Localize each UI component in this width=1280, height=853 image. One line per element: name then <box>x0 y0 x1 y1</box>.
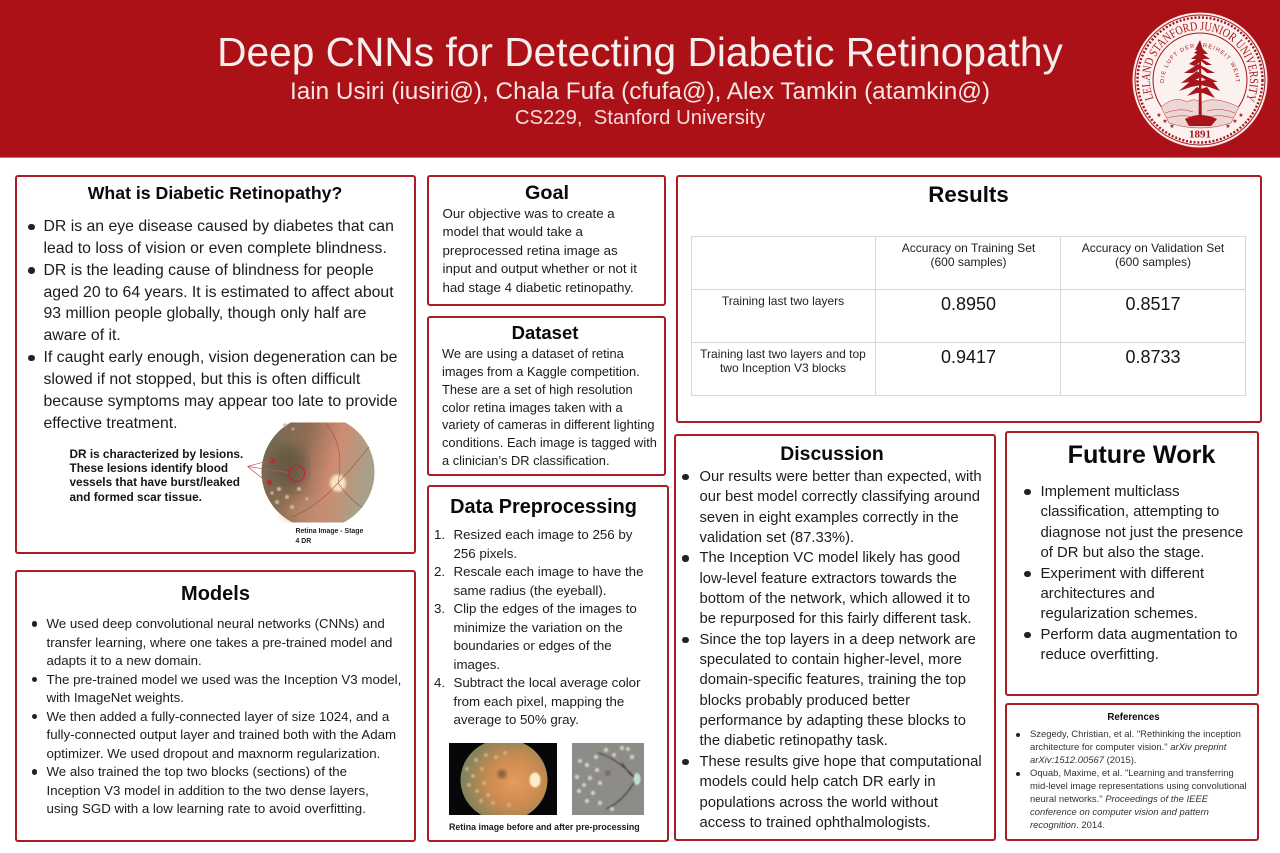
model bullets: fully-connected output layer and trained both with the Adam <box>46 727 396 742</box>
heading: Goal <box>525 182 569 204</box>
goal text: had stage 4 diabetic retinopathy. <box>442 280 634 294</box>
reference list: Szegedy, Christian, et al. "Rethinking the inception <box>1030 729 1241 740</box>
lesion caption: vessels that have burst/leaked <box>70 475 240 489</box>
bullet list: DR is the leading cause of blindness for people <box>44 262 374 279</box>
model bullets: We used deep convolutional neural networks (CNNs) and <box>46 616 385 631</box>
reference list: Oquab, Maxime, et al. "Learning and transferring <box>1030 768 1234 779</box>
lesion caption: These lesions identify blood <box>70 461 228 475</box>
heading: References <box>1107 712 1160 723</box>
image caption: Retina image before and after pre-processing <box>449 822 640 832</box>
goal text: input and output whether or not it <box>442 261 637 276</box>
dataset text <box>442 346 657 468</box>
future work bullets: Experiment with different <box>1040 566 1204 582</box>
discussion bullets: performance by adapting these blocks to <box>700 713 966 729</box>
future work bullets: diagnose not just the presence <box>1040 525 1243 541</box>
discussion bullets: bottom of the network, which allowed it to <box>700 591 970 607</box>
model bullets: adapts it to a new domain. <box>46 653 202 668</box>
authors: Iain Usiri (iusiri@), Chala Fufa (cfufa@), Alex Tamkin (atamkin@) <box>290 78 990 105</box>
bullet list: If caught early enough, vision degeneration can be <box>44 349 397 366</box>
numbered steps: Resized each image to 256 by <box>454 527 632 542</box>
header banner <box>0 0 1280 158</box>
numbered steps: from each pixel, mapping the <box>454 694 624 708</box>
heading: What is Diabetic Retinopathy? <box>88 182 342 202</box>
numbered steps: 256 pixels. <box>454 546 517 560</box>
reference list: arXiv:1512.00567 (2015). <box>1030 755 1137 766</box>
title: Deep CNNs for Detecting Diabetic Retinopathy <box>217 29 1063 75</box>
discussion bullets: the diabetic retinopathy task. <box>700 733 888 749</box>
panel: Future Work <box>1005 431 1259 696</box>
bullet list: because symptoms may appear too late to provide <box>44 393 397 410</box>
reference list: neural networks." Proceedings of the IEEE <box>1030 794 1208 805</box>
model bullets <box>32 616 401 816</box>
future work bullets: classification, attempting to <box>1040 504 1219 520</box>
results table: Accuracy on Training Set <box>901 240 1035 254</box>
retina image after pre-processing <box>572 743 644 815</box>
model bullets: transfer learning, where one takes a pre-trained model and <box>46 634 392 650</box>
future work bullets: regularization schemes. <box>1040 606 1198 622</box>
dataset text: color retina images taken with a <box>442 400 623 415</box>
discussion bullets: The Inception VC model likely has good <box>700 550 960 566</box>
discussion bullets: speculated to contain higher-level, more <box>700 652 962 668</box>
discussion bullets: validation set (87.33%). <box>700 530 854 546</box>
retina image: stage 4 DR <box>247 422 374 522</box>
icon: Stanford seal: ★ <box>1169 123 1175 130</box>
numbered steps <box>434 527 643 727</box>
results table <box>691 236 1246 396</box>
future work bullets: architectures and <box>1040 586 1155 602</box>
icon: Stanford seal: ★ <box>1162 118 1168 125</box>
image caption: 4 DR <box>296 538 311 544</box>
panel: Data Preprocessing <box>427 485 669 842</box>
model bullets: optimizer. We used dropout and maxnorm regularization. <box>46 746 380 760</box>
heading: Discussion <box>780 442 884 464</box>
lesion caption: DR is characterized by lesions. <box>70 447 243 461</box>
discussion bullets: Our results were better than expected, with <box>700 469 982 485</box>
icon: Stanford seal: ★ <box>1156 112 1162 119</box>
icon: Stanford seal: LELAND STANFORD JUNIOR UNIVERSITY <box>1142 22 1258 102</box>
lesion caption: and formed scar tissue. <box>70 490 202 504</box>
heading: Dataset <box>512 322 578 342</box>
results table: (600 samples) <box>930 254 1006 268</box>
results table: (600 samples) <box>1114 254 1191 268</box>
dataset text: conditions. Each image is tagged with <box>442 435 657 450</box>
dataset text: These are a set of high resolution <box>442 382 633 397</box>
results table: Training last two layers and top <box>700 346 866 360</box>
goal text: Our objective was to create a <box>442 206 615 220</box>
panel: Goal <box>427 175 666 306</box>
numbered steps: 3. <box>434 601 445 616</box>
future work bullets <box>1024 484 1243 663</box>
heading: Results <box>928 182 1009 207</box>
bullet list <box>28 218 397 432</box>
icon: Stanford seal: 1891 <box>1189 128 1211 140</box>
panel: Dataset <box>427 316 666 476</box>
discussion bullets: be repurposed for this fairly different task. <box>700 611 971 627</box>
numbered steps: same radius (the eyeball). <box>454 582 606 598</box>
results table: Accuracy on Validation Set <box>1081 240 1224 254</box>
numbered steps: average to 50% gray. <box>454 712 579 727</box>
panel: Results <box>676 175 1262 423</box>
numbered steps: images. <box>454 656 500 672</box>
bullet list: 93 million people globally, though only half are <box>44 305 366 322</box>
dataset text: a clinician’s DR classification. <box>442 453 610 468</box>
bullet list: DR is an eye disease caused by diabetes that can <box>44 218 394 235</box>
retina image before pre-processing <box>449 743 557 815</box>
goal text: model that would take a <box>442 224 583 239</box>
model bullets: The pre-trained model we used was the Inception V3 model, <box>46 672 401 686</box>
numbered steps: minimize the variation on the <box>454 620 623 634</box>
goal text: preprocessed retina image as <box>442 242 618 258</box>
discussion bullets: our best model correctly classifying around <box>700 489 980 505</box>
panel: Discussion <box>674 434 996 841</box>
discussion bullets: populations across the world without <box>700 794 938 810</box>
dataset text: variety of cameras in different lighting <box>442 417 655 432</box>
icon: Stanford seal: ★ <box>1232 118 1238 125</box>
icon: Stanford seal <box>1132 12 1268 148</box>
bullet list: slowed if not stopped, but this is often difficult <box>44 371 360 388</box>
model bullets: We then added a fully-connected layer of size 1024, and a <box>46 708 389 724</box>
panel: What is Diabetic Retinopathy <box>15 175 416 554</box>
discussion bullets: blocks probably produced better <box>700 693 910 709</box>
discussion bullets: These results give hope that computational <box>700 754 982 770</box>
discussion bullets: domain-specific features, training the top <box>700 672 966 688</box>
image caption <box>296 528 364 544</box>
reference list: mid-level image representations using convolutional <box>1030 781 1247 792</box>
reference list: architecture for computer vision." arXiv preprint <box>1030 742 1226 753</box>
numbered steps: Rescale each image to have the <box>454 564 643 579</box>
model bullets: with ImageNet weights. <box>46 690 184 705</box>
icon: Stanford seal: ★ <box>1238 112 1244 119</box>
icon: Stanford seal: DIE LUFT DER FREIHEIT WEHT <box>1160 43 1240 82</box>
model bullets: using SGD with a low learning rate to avoid overfitting. <box>46 801 366 816</box>
panel: References <box>1005 703 1259 841</box>
numbered steps: 1. <box>434 527 445 542</box>
results table: 0.8517 <box>1125 294 1180 314</box>
reference list: recognition. 2014. <box>1030 820 1105 831</box>
discussion bullets: access to trained ophthalmologists. <box>700 815 931 831</box>
image caption: Retina Image - Stage <box>296 528 363 535</box>
icon: Stanford seal: ★ <box>1225 123 1231 130</box>
dataset text: We are using a dataset of retina <box>442 346 624 361</box>
discussion bullets: low-level feature extractors towards the <box>700 571 957 587</box>
numbered steps: 2. <box>434 564 445 579</box>
future work bullets: Implement multiclass <box>1040 484 1180 500</box>
heading: Data Preprocessing <box>450 496 637 518</box>
numbered steps: Clip the edges of the images to <box>454 601 637 616</box>
numbered steps: boundaries or edges of the <box>454 638 612 653</box>
reference list <box>1016 729 1247 831</box>
bullet list: aged 20 to 64 years. It is estimated to affect about <box>44 284 394 301</box>
discussion bullets: seven in eight examples correctly in the <box>700 510 959 526</box>
discussion bullets: Since the top layers in a deep network are <box>700 632 976 648</box>
numbered steps: 4. <box>434 675 445 690</box>
bullet list: lead to loss of vision or even complete blindness. <box>44 240 387 257</box>
future work bullets: of DR but also the stage. <box>1040 545 1204 561</box>
bullet list: aware of it. <box>44 327 121 344</box>
reference list: conference on computer vision and pattern <box>1030 807 1209 818</box>
heading: Models <box>181 583 250 605</box>
results table: Training last two layers <box>721 294 844 308</box>
discussion bullets: models could help catch DR early in <box>700 774 936 790</box>
results table: two Inception V3 blocks <box>719 360 846 374</box>
panel: Models <box>15 570 416 842</box>
future work bullets: reduce overfitting. <box>1040 647 1159 663</box>
goal text <box>442 206 637 294</box>
discussion bullets <box>682 469 982 831</box>
results table: 0.8950 <box>940 294 996 314</box>
course and university: CS229, Stanford University <box>515 107 765 129</box>
model bullets: We also trained the top two blocks (sections) of the <box>46 764 347 779</box>
heading: Future Work <box>1068 441 1215 469</box>
lesion caption <box>70 447 243 504</box>
bullet list: effective treatment. <box>44 415 178 432</box>
dataset text: images from a Kaggle competition. <box>442 364 640 379</box>
future work bullets: Perform data augmentation to <box>1040 627 1238 643</box>
results table: 0.9417 <box>940 346 996 366</box>
results table: 0.8733 <box>1125 346 1180 366</box>
numbered steps: Subtract the local average color <box>454 675 641 690</box>
model bullets: Inception V3 model in addition to the two dense layers, <box>46 782 369 798</box>
